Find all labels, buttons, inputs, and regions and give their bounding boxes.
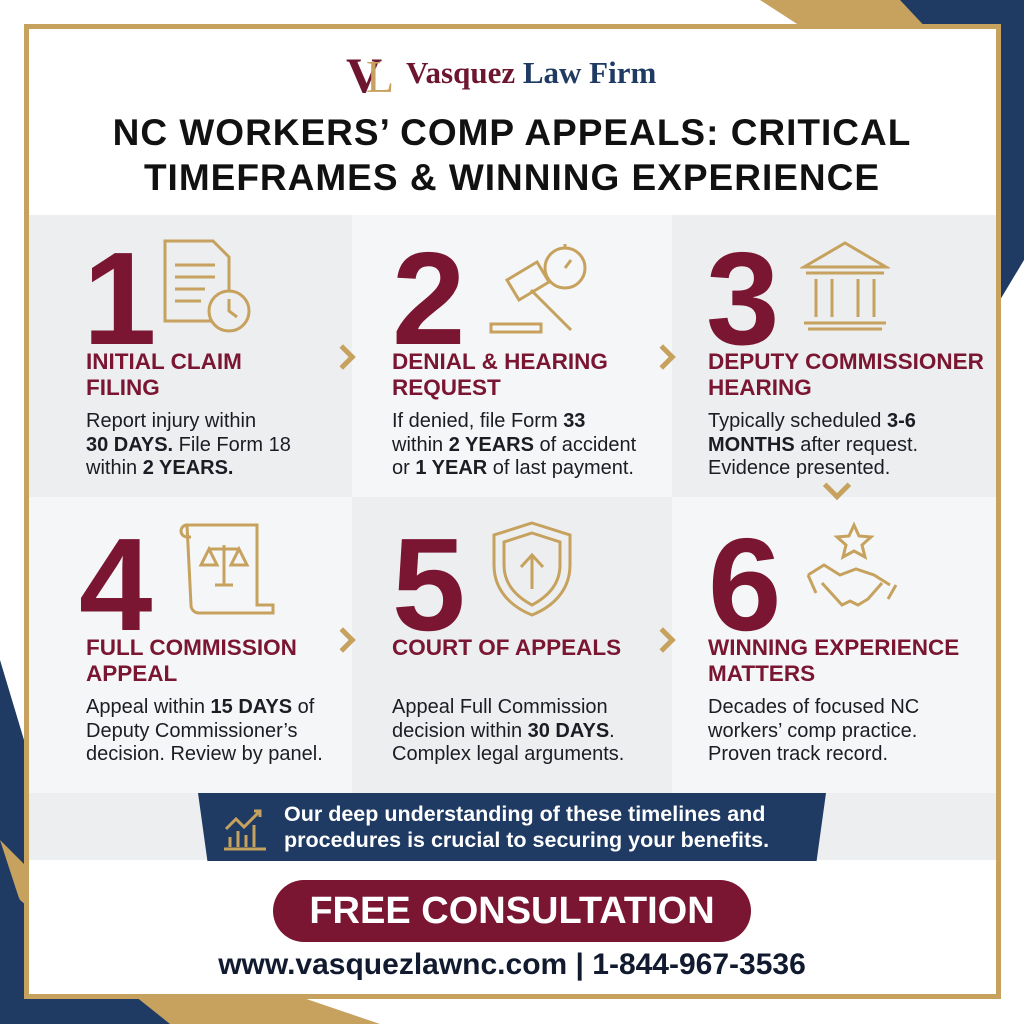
CTA button <box>273 880 751 942</box>
callout banner: procedures is crucial to securing your benefits. <box>284 828 769 852</box>
panel 2: DENIAL & HEARING <box>392 349 608 374</box>
logo: Vasquez Law Firm <box>406 55 656 90</box>
panel 5 <box>392 511 624 765</box>
panel 3: DEPUTY COMMISSIONER <box>708 349 984 374</box>
logo <box>346 47 656 103</box>
panel 3: Evidence presented. <box>708 457 890 479</box>
panel 6: WINNING EXPERIENCE <box>708 635 959 660</box>
panel 1: Report injury within <box>86 410 256 432</box>
icon: scroll with scales <box>180 524 274 614</box>
panel 5: Appeal Full Commission <box>392 696 608 718</box>
logo: L <box>366 51 394 102</box>
panel 4: APPEAL <box>86 661 177 686</box>
panel 3: Typically scheduled 3-6 <box>708 410 916 432</box>
callout banner <box>198 793 826 861</box>
CTA button: FREE CONSULTATION <box>309 890 715 932</box>
icon: chart <box>224 810 266 850</box>
panel 4: Deputy Commissioner’s <box>86 720 298 742</box>
panel 3: 3 <box>706 225 775 372</box>
panel 3: HEARING <box>708 375 812 400</box>
panel 1: FILING <box>86 375 160 400</box>
arrow down <box>823 472 851 500</box>
icon: handshake with star <box>806 522 898 607</box>
panel 6: workers’ comp practice. <box>708 720 917 742</box>
panel 1: 30 DAYS. File Form 18 <box>86 434 291 456</box>
logo: V <box>346 47 382 103</box>
panel 1: INITIAL CLAIM <box>86 349 242 374</box>
contact: www.vasquezlawnc.com | 1-844-967-3536 <box>218 948 806 981</box>
callout banner: Our deep understanding of these timelines and <box>284 802 765 826</box>
grid backgrounds <box>29 215 996 860</box>
panel 2: within 2 YEARS of accident <box>392 434 636 456</box>
title: NC WORKERS’ COMP APPEALS: CRITICAL <box>113 112 911 153</box>
panel 5: Complex legal arguments. <box>392 743 624 765</box>
panel 4: Appeal within 15 DAYS of <box>86 696 314 718</box>
panel 1 <box>83 225 291 479</box>
icon: shield with arrow <box>492 521 572 617</box>
panel 6: MATTERS <box>708 661 815 686</box>
icon: document with clock <box>164 240 250 332</box>
title <box>113 112 911 198</box>
panel 3 <box>706 225 984 479</box>
panel 4 <box>79 511 323 765</box>
arrow <box>330 344 356 370</box>
panel 1: 1 <box>83 225 152 372</box>
panel 4: 4 <box>79 511 148 658</box>
panel 6: Proven track record. <box>708 743 888 765</box>
panel 3: MONTHS after request. <box>708 434 918 456</box>
icon: courthouse <box>800 241 890 330</box>
panel 6: Decades of focused NC <box>708 696 919 718</box>
panel 2: REQUEST <box>392 375 501 400</box>
panel 6: 6 <box>708 511 777 658</box>
panel 1: within 2 YEARS. <box>86 457 233 479</box>
title: TIMEFRAMES & WINNING EXPERIENCE <box>144 157 880 198</box>
panel 2 <box>392 225 636 479</box>
panel 5: decision within 30 DAYS. <box>392 720 615 742</box>
panel 5: COURT OF APPEALS <box>392 635 621 660</box>
panel 2: or 1 YEAR of last payment. <box>392 457 634 479</box>
panel 4: decision. Review by panel. <box>86 743 323 765</box>
panel 5: 5 <box>392 511 461 658</box>
panel 6 <box>708 511 959 765</box>
panel 2: 2 <box>392 225 461 372</box>
panel 2: If denied, file Form 33 <box>392 410 585 432</box>
icon: gavel and stopwatch <box>490 244 586 334</box>
panel 4: FULL COMMISSION <box>86 635 297 660</box>
